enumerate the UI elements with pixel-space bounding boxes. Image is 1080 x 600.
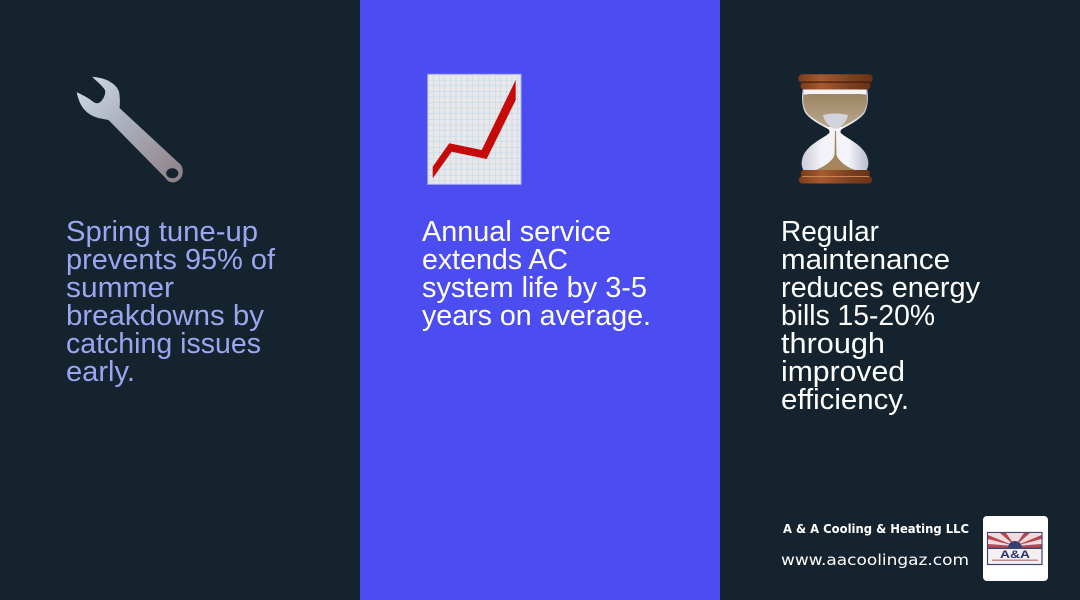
text: tune-up benefit: Spring tune-up (66, 216, 258, 248)
logo (983, 516, 1048, 581)
panel: tune-up (0, 0, 360, 600)
text: tune-up benefit: catching issues (66, 328, 261, 360)
text: tune-up benefit: summer (66, 272, 175, 304)
icon: hourglass (798, 74, 873, 184)
icon: rising chart (428, 74, 521, 184)
text: annual service benefit: Annual service (422, 216, 611, 248)
text: tune-up benefit: prevents 95% of (66, 244, 275, 276)
text: annual service benefit: system life by 3-5 (422, 272, 647, 304)
logo: A&A (1000, 549, 1030, 561)
text: annual service benefit: years on average. (422, 300, 651, 332)
text: energy savings benefit: reduces energy (781, 272, 981, 304)
text: energy savings benefit: Regular (781, 216, 879, 248)
text: energy savings benefit: efficiency. (781, 384, 909, 416)
text: energy savings benefit: improved (781, 356, 905, 388)
text: tune-up benefit: early. (66, 356, 135, 388)
panel: energy savings (720, 0, 1080, 600)
text: energy savings benefit: through (781, 328, 885, 360)
icon: wrench (77, 77, 183, 182)
website: www.aacoolingaz.com (781, 551, 969, 569)
text: energy savings benefit (781, 216, 981, 416)
company name: A & A Cooling & Heating LLC (783, 521, 969, 536)
panel: annual service (360, 0, 720, 600)
text: tune-up benefit: breakdowns by (66, 300, 265, 332)
text: energy savings benefit: maintenance (781, 244, 950, 276)
text: energy savings benefit: bills 15-20% (781, 300, 935, 332)
text: annual service benefit (422, 216, 651, 332)
text: annual service benefit: extends AC (422, 244, 568, 276)
text: tune-up benefit (66, 216, 275, 388)
